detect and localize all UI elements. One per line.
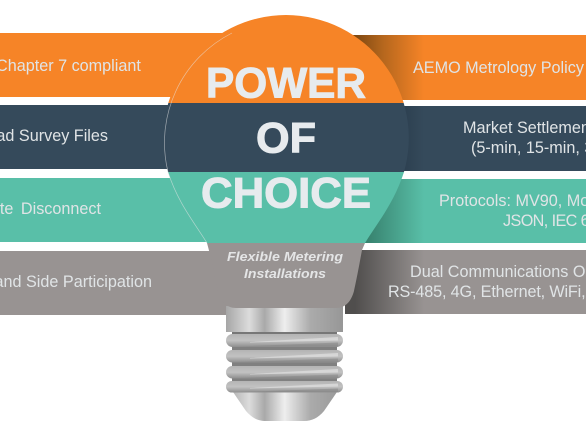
icon: metal bulb base	[226, 306, 343, 421]
title: Power of Choice	[201, 60, 371, 218]
icon: light bulb body	[164, 15, 408, 308]
subtitle: Flexible Metering Installations: Flexible Metering	[227, 250, 343, 264]
bar: Chapter 7 compliant: Chapter 7 compliant	[0, 57, 141, 75]
title: Power of Choice: CHOICE	[201, 170, 371, 218]
bar: Chapter 7 compliant	[0, 33, 240, 97]
bar: Load Survey Files	[0, 105, 240, 169]
panel: left feature bars	[0, 33, 240, 315]
title: Power of Choice: OF	[256, 114, 316, 162]
bar: Dual Communications Options	[345, 250, 586, 314]
bar: Market Settlement	[345, 106, 586, 171]
bar: Demand Side Participation	[0, 251, 240, 315]
subtitle: Flexible Metering Installations: Installations	[244, 267, 326, 281]
bar: Protocols	[345, 179, 586, 243]
bar: Remote Disconnect	[0, 178, 240, 242]
panel: right feature bars	[345, 35, 586, 314]
bar: AEMO Metrology Policy: AEMO Metrology Policy	[413, 59, 585, 77]
bulb outline highlight	[164, 33, 232, 243]
subtitle: Flexible Metering Installations	[227, 250, 343, 281]
title: Power of Choice: POWER	[206, 60, 366, 108]
bar: AEMO Metrology Policy	[345, 35, 586, 100]
